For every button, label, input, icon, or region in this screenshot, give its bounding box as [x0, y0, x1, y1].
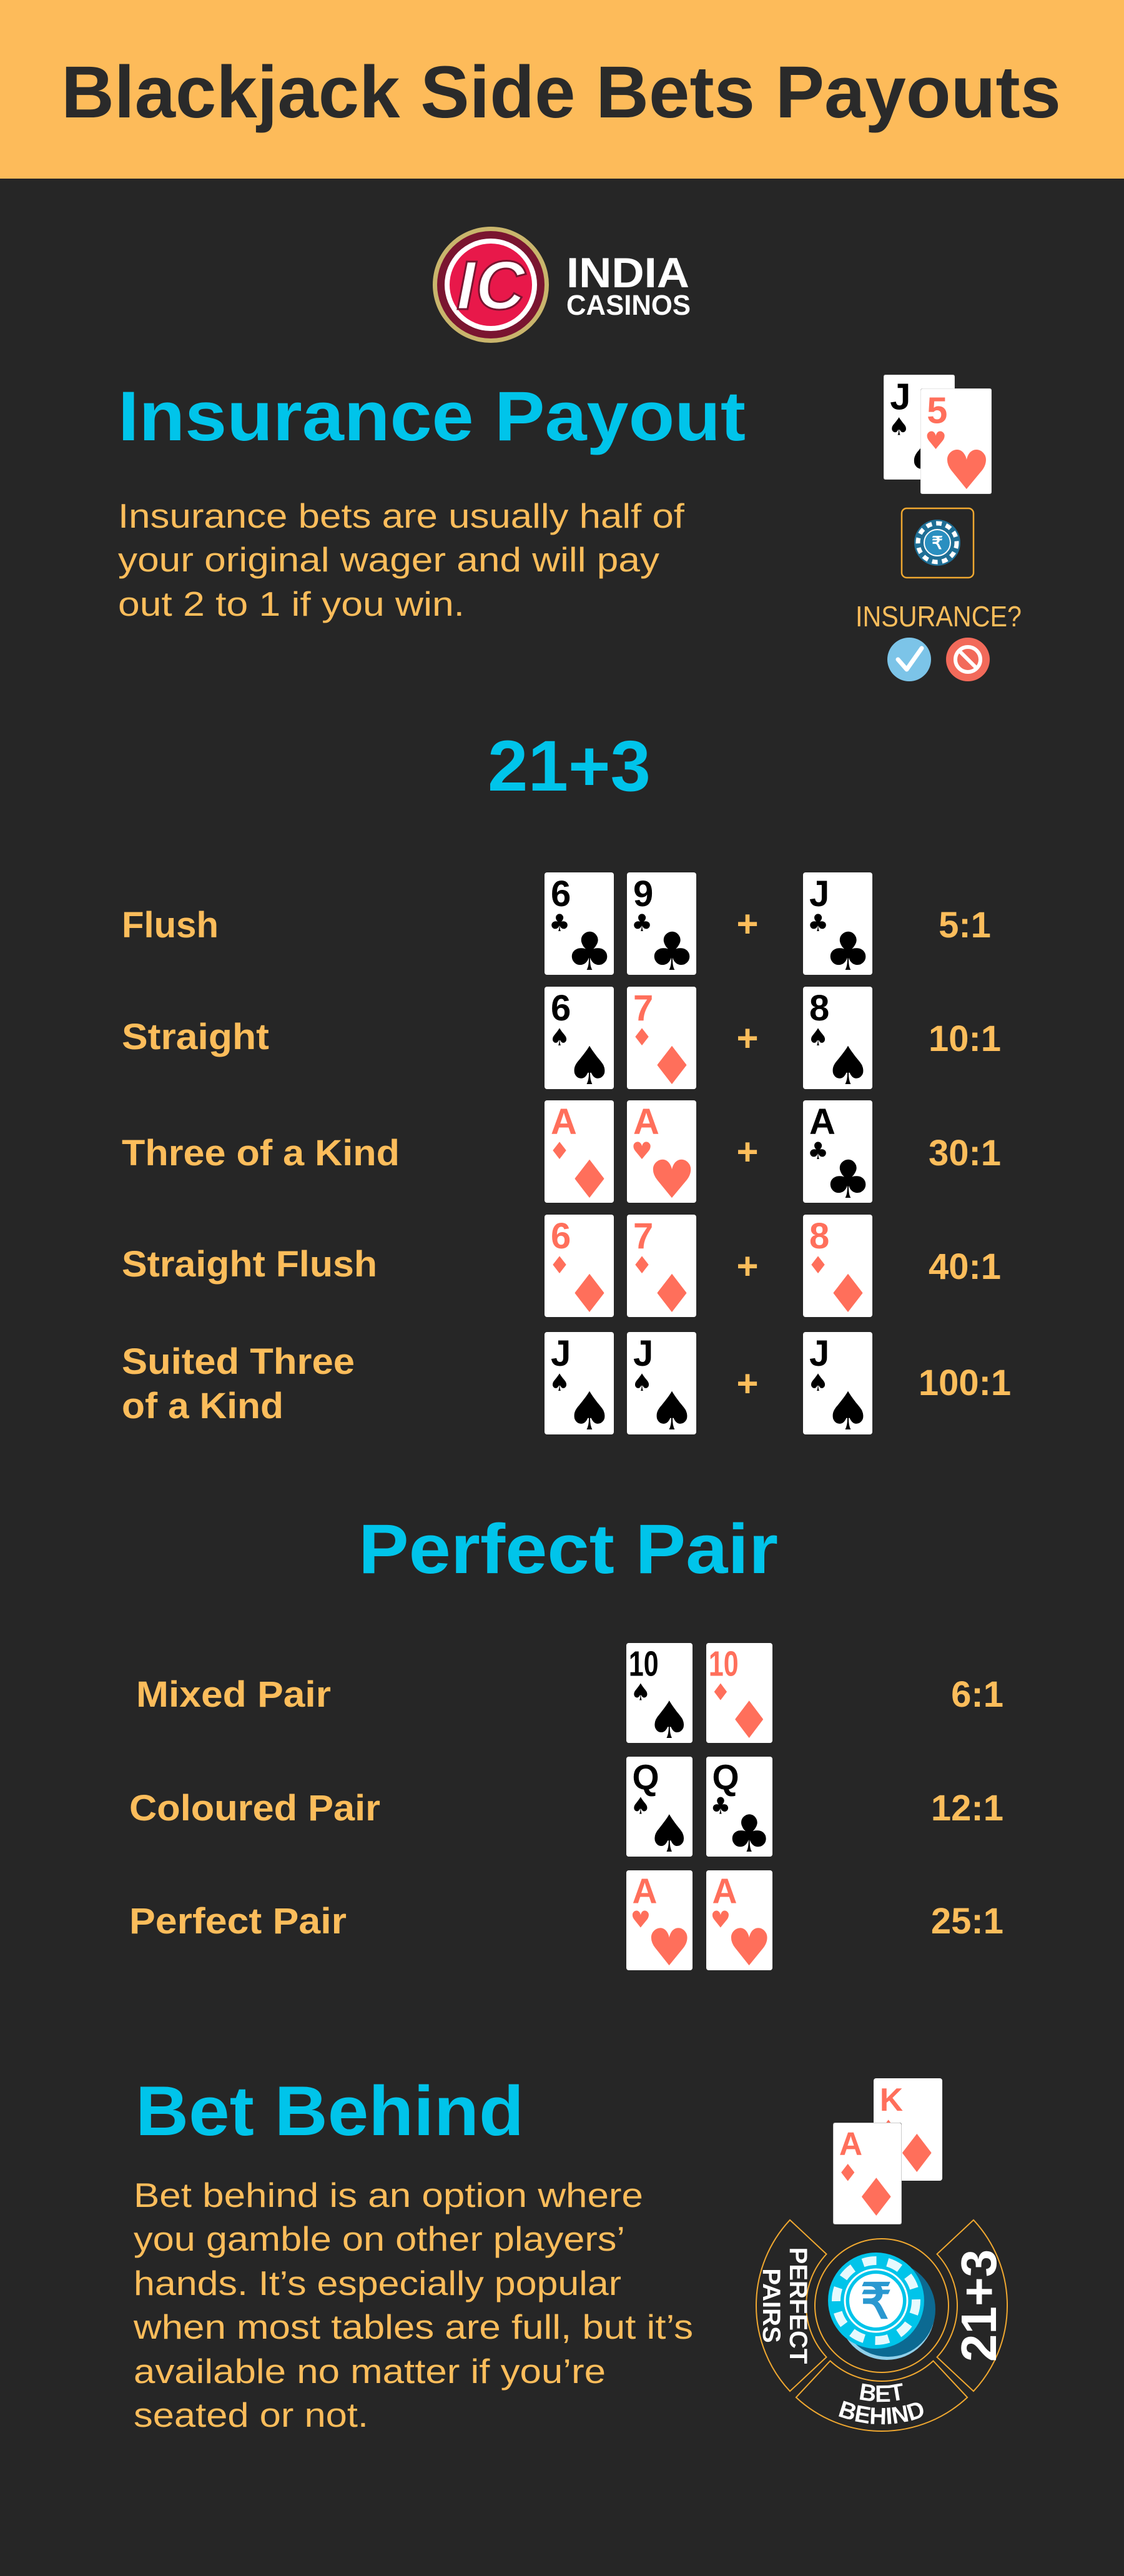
row: Perfect Pair: A — [712, 1871, 737, 1911]
row: Mixed Pair: ♠ — [647, 1691, 692, 1750]
icon: rupee chip — [828, 2253, 935, 2360]
row: Perfect Pair — [129, 1870, 1003, 1978]
row: Flush: Flush — [122, 905, 219, 945]
row: Straight Flush: ♦ — [824, 1263, 872, 1325]
row: Mixed Pair: ♠ — [631, 1679, 651, 1706]
row: Suited Three of a Kind: ♠ — [648, 1381, 696, 1442]
row: Three of a Kind: A — [809, 1102, 836, 1142]
row: Straight: ♦ — [631, 1024, 653, 1051]
row: Straight Flush: 40:1 — [929, 1246, 1001, 1287]
heading: Bet Behind: Bet Behind — [136, 2072, 524, 2150]
row: Three of a Kind: A — [633, 1102, 659, 1142]
text block: bet behind description: hands. It’s especially popular — [134, 2264, 621, 2302]
row: Straight: ♠ — [824, 1035, 872, 1097]
row: Three of a Kind: ♦ — [566, 1149, 613, 1210]
row: Suited Three of a Kind: of a Kind — [122, 1386, 283, 1426]
row: Straight: 10:1 — [929, 1019, 1001, 1059]
row: Coloured Pair: Q — [712, 1757, 739, 1797]
row: Three of a Kind: 30:1 — [929, 1133, 1001, 1173]
row: Straight Flush: ♦ — [807, 1251, 829, 1279]
row: Coloured Pair: 12:1 — [931, 1788, 1003, 1828]
heading: Perfect Pair: Perfect Pair — [358, 1510, 778, 1588]
title: Blackjack Side Bets Payouts — [61, 51, 1061, 134]
row: Flush: ♣ — [824, 921, 872, 982]
label: bet behind — [839, 2383, 924, 2424]
row: Suited Three of a Kind: J — [633, 1333, 653, 1374]
row: Straight Flush: ♦ — [566, 1263, 613, 1325]
icon: chip box: ₹ — [932, 533, 943, 553]
row: Suited Three of a Kind: Suited Three — [122, 1341, 355, 1382]
row: Three of a Kind: ♣ — [824, 1149, 872, 1210]
icon: insurance cards J and 5: J — [890, 375, 910, 417]
row: Flush: ♣ — [566, 921, 613, 982]
row: Straight: 8 — [809, 988, 829, 1029]
icon: insurance cards J and 5: ♠ — [905, 425, 954, 488]
row: Straight: ♠ — [807, 1024, 829, 1051]
row: Straight Flush: + — [736, 1245, 759, 1287]
row: Straight Flush: 7 — [633, 1216, 653, 1256]
row: Three of a Kind: ♦ — [549, 1137, 570, 1165]
icon: no ban — [946, 638, 990, 681]
icon: chip box — [902, 508, 974, 578]
row: Suited Three of a Kind: ♠ — [631, 1369, 653, 1396]
row: Straight Flush: ♦ — [648, 1263, 696, 1325]
icon: rupee chip: ₹ — [860, 2274, 892, 2329]
row: Flush: 9 — [633, 874, 653, 914]
row: Flush: + — [736, 903, 759, 945]
row: Perfect Pair: A — [633, 1871, 658, 1911]
row: Mixed Pair: 6:1 — [951, 1674, 1003, 1715]
label: 21+3: 21+3 — [951, 2249, 1007, 2362]
row: Three of a Kind: + — [736, 1131, 759, 1173]
icon: A and K of diamonds: ♦ — [853, 2168, 900, 2228]
row: Suited Three of a Kind: + — [736, 1363, 759, 1404]
row: Coloured Pair: Coloured Pair — [129, 1788, 380, 1828]
row: Perfect Pair: ♥ — [711, 1906, 731, 1933]
text block: bet behind description: you gamble on other players’ — [134, 2219, 625, 2258]
logo: India Casinos: CASINOS — [566, 289, 691, 321]
icon: A and K of diamonds: ♦ — [878, 2115, 899, 2143]
row: Flush: ♣ — [631, 909, 653, 937]
row: Suited Three of a Kind: J — [551, 1333, 571, 1374]
label: bet behind: BET — [859, 2383, 903, 2402]
text block: bet behind description: when most tables are full, but it’s — [133, 2307, 693, 2346]
row: Straight Flush: Straight Flush — [122, 1244, 377, 1285]
icon: insurance cards J and 5: 5 — [927, 390, 947, 432]
text block: insurance description: Insurance bets are usually half of — [118, 496, 685, 535]
icon: A and K of diamonds: ♦ — [894, 2123, 940, 2184]
icon: yes check — [887, 638, 931, 681]
text block: bet behind description: Bet behind is an option where — [134, 2176, 643, 2214]
icon: betting table layout — [756, 2219, 1008, 2432]
row: Three of a Kind: ♣ — [807, 1137, 829, 1165]
row: Straight Flush: ♦ — [549, 1251, 570, 1279]
row: Mixed Pair: ♦ — [727, 1691, 772, 1750]
row: Perfect Pair: ♥ — [647, 1918, 692, 1978]
header banner — [0, 0, 1124, 179]
row: Suited Three of a Kind: J — [809, 1333, 829, 1374]
row: Flush: ♣ — [807, 909, 829, 937]
row: Flush: ♣ — [648, 921, 696, 982]
row: Coloured Pair: Q — [633, 1757, 659, 1797]
row: Mixed Pair: ♦ — [711, 1679, 731, 1706]
logo: India Casinos: INDIA — [566, 249, 689, 297]
label: perfect pairs: PAIRS — [757, 2268, 785, 2343]
row: Suited Three of a Kind: ♠ — [824, 1381, 872, 1442]
icon: A and K of diamonds: K — [880, 2081, 903, 2118]
text block: insurance description: out 2 to 1 if you win. — [118, 585, 465, 623]
row: Coloured Pair: ♠ — [647, 1805, 692, 1864]
text block: bet behind description — [133, 2176, 693, 2434]
icon: insurance cards J and 5: ♥ — [925, 427, 947, 455]
row: Perfect Pair: ♥ — [631, 1906, 651, 1933]
row: Flush — [122, 872, 991, 982]
row: Suited Three of a Kind — [122, 1332, 1011, 1442]
row: Perfect Pair: Perfect Pair — [129, 1901, 347, 1942]
heading: Insurance Payout: Insurance Payout — [118, 377, 746, 455]
row: Straight: + — [736, 1017, 759, 1059]
row: Straight: ♠ — [549, 1024, 570, 1051]
row: Suited Three of a Kind: 100:1 — [919, 1363, 1011, 1403]
row: Coloured Pair: ♣ — [727, 1805, 772, 1864]
icon: insurance cards J and 5: ♠ — [888, 413, 910, 441]
row: Flush: J — [809, 874, 829, 914]
row: Three of a Kind: Three of a Kind — [122, 1133, 400, 1173]
row: Straight Flush — [122, 1215, 1001, 1325]
row: Coloured Pair: ♣ — [711, 1792, 731, 1820]
icon: A and K of diamonds: ♦ — [837, 2159, 859, 2186]
row: Perfect Pair: 25:1 — [931, 1901, 1003, 1942]
text block: bet behind description: available no matter if you’re — [134, 2352, 606, 2391]
row: Mixed Pair: 10 — [709, 1644, 739, 1684]
label: bet behind: BEHIND — [839, 2401, 924, 2424]
row: Mixed Pair — [136, 1643, 1003, 1750]
row: Mixed Pair: 10 — [629, 1644, 659, 1684]
row: Suited Three of a Kind: ♠ — [807, 1369, 829, 1396]
icon: insurance cards J and 5 — [884, 375, 992, 502]
row: Straight: 7 — [633, 988, 653, 1029]
row: Perfect Pair: ♥ — [727, 1918, 772, 1978]
row: Three of a Kind — [122, 1100, 1001, 1210]
row: Flush: ♣ — [549, 909, 570, 937]
logo: India Casinos: IC — [456, 247, 526, 324]
row: Straight: ♠ — [566, 1035, 613, 1097]
text block: bet behind description: seated or not. — [134, 2396, 368, 2434]
label: INSURANCE?: INSURANCE? — [855, 600, 1022, 633]
row: Suited Three of a Kind: ♠ — [566, 1381, 613, 1442]
text block: insurance description — [118, 496, 685, 623]
row: Straight: ♦ — [648, 1035, 696, 1097]
row: Straight Flush: ♦ — [631, 1251, 653, 1279]
heading: 21+3: 21+3 — [488, 726, 651, 806]
row: Straight: Straight — [122, 1017, 269, 1057]
row: Flush: 5:1 — [939, 905, 991, 945]
row: Three of a Kind: ♥ — [648, 1149, 696, 1210]
row: Suited Three of a Kind: ♠ — [549, 1369, 570, 1396]
row: Straight: 6 — [551, 988, 571, 1029]
text block: insurance description: your original wager and will pay — [118, 540, 660, 579]
row: Straight Flush: 6 — [551, 1216, 571, 1256]
row: Coloured Pair: ♠ — [631, 1792, 651, 1820]
row: Mixed Pair: Mixed Pair — [136, 1674, 331, 1715]
icon: A and K of diamonds — [833, 2078, 942, 2228]
row: Straight Flush: 8 — [809, 1216, 829, 1256]
label: perfect pairs: PERFECT — [784, 2248, 812, 2364]
label: perfect pairs — [757, 2248, 812, 2364]
row: Flush: 6 — [551, 874, 571, 914]
icon: A and K of diamonds: A — [839, 2126, 862, 2162]
icon: insurance cards J and 5: ♥ — [942, 440, 991, 502]
row: Three of a Kind: A — [551, 1102, 577, 1142]
row: Three of a Kind: ♥ — [631, 1137, 653, 1165]
row: Coloured Pair — [129, 1757, 1003, 1864]
logo: India Casinos — [433, 227, 691, 343]
row: Straight — [122, 987, 1001, 1097]
